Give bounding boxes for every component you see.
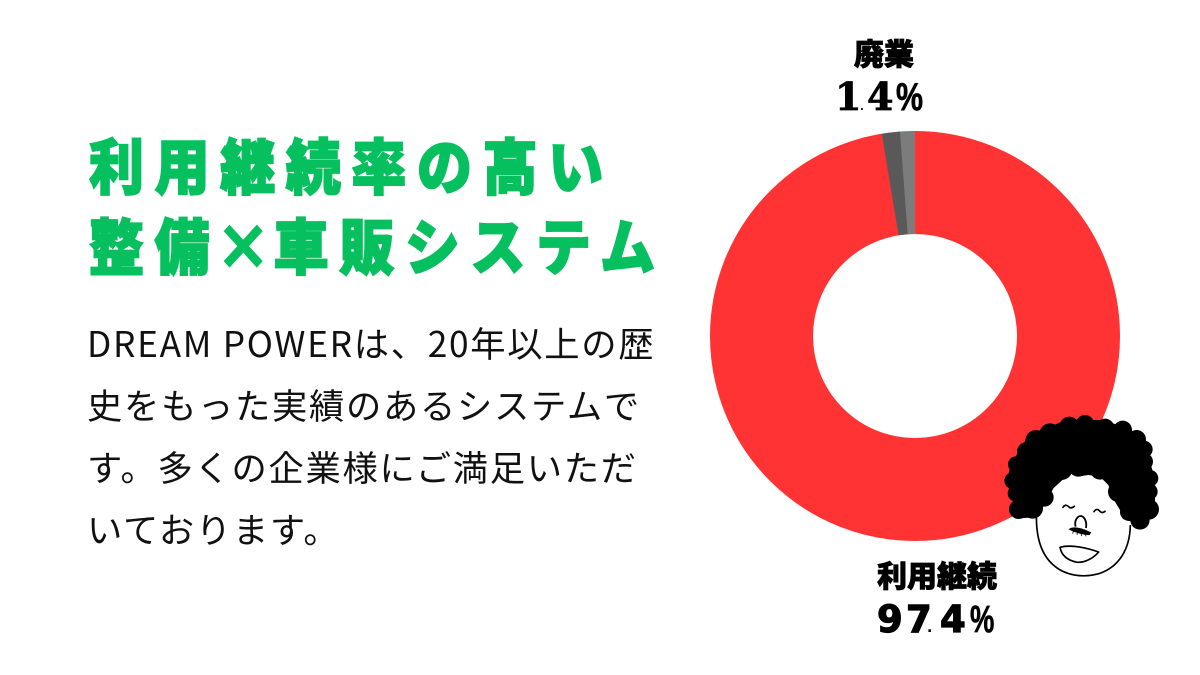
eyes [1063,505,1105,513]
value: 1.4%: 1 [835,74,861,119]
text block: description: す。多くの企業様にご満足いただ [87,441,638,492]
value: 97.4%: % [970,599,994,641]
text block: description [87,317,655,554]
slice: 廃業 dark [882,132,908,235]
label: 利用継続: 利用継続 [877,552,997,596]
label: 廃業 [835,30,923,119]
value: 97.4%: . [927,620,932,636]
mouth [1060,546,1099,562]
value: 1.4% [835,74,923,119]
slice: 廃業 light [900,131,915,234]
slice: 利用継続 97.4% [762,182,1068,490]
value: 97.4%: 7 [906,598,932,641]
face [1036,477,1130,576]
text block: description: DREAM POWERは、20年以上の歴 [87,317,655,368]
value: 97.4% [877,598,994,641]
nose [1075,516,1086,528]
hair [1004,415,1159,530]
heading: title: 利用継続率の高い [89,118,614,206]
text block: description: 史をもった実績のあるシステムで [87,379,641,430]
value: 97.4%: 4 [940,598,966,641]
icon: afro character [1004,415,1159,576]
label: 廃業: 廃業 [854,30,914,74]
value: 1.4%: . [860,100,864,113]
label: 利用継続 [877,552,997,641]
value: 1.4%: % [896,75,923,119]
heading: title [88,118,666,286]
text block: description: いております。 [87,503,340,554]
value: 97.4%: 9 [877,598,903,641]
moustache [1069,528,1091,536]
heading: title: 整備×車販システム [89,198,666,286]
value: 1.4%: 4 [867,74,893,119]
